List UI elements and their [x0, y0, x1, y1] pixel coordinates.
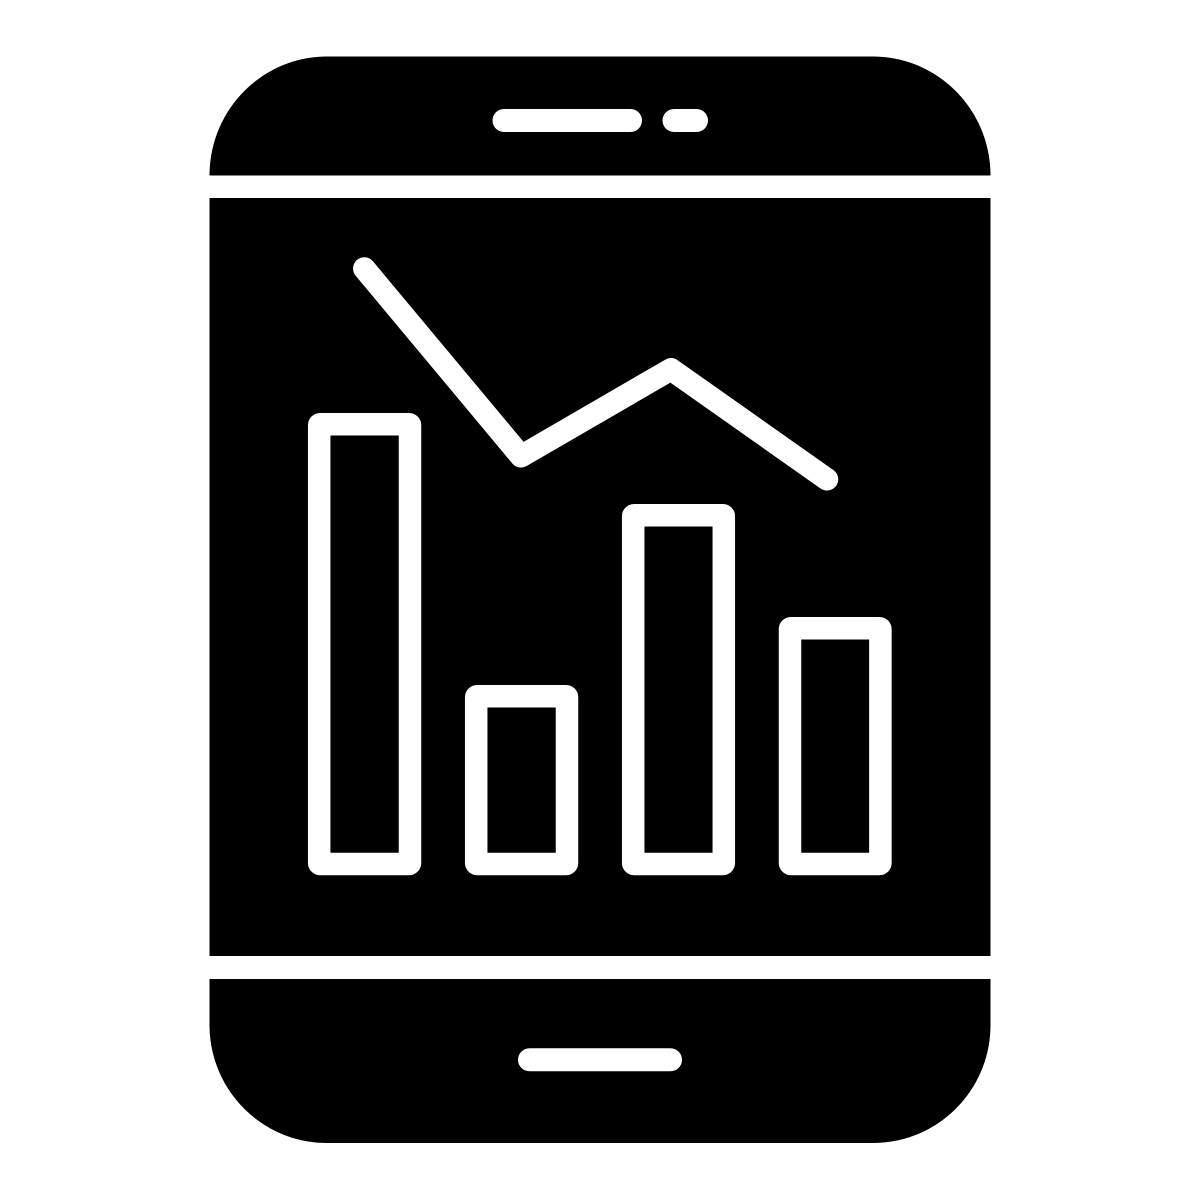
- speaker slot: [492, 109, 642, 132]
- phone bottom bezel: [210, 979, 990, 1143]
- phone top bezel: [210, 56, 990, 176]
- bar 1: [319, 424, 410, 864]
- bar 3: [633, 515, 724, 864]
- phone screen: [210, 198, 990, 956]
- bar 2: [476, 696, 567, 864]
- bar 4: [790, 628, 880, 864]
- camera slot: [662, 109, 708, 132]
- line chart: [364, 268, 827, 479]
- home button slot: [518, 1048, 682, 1071]
